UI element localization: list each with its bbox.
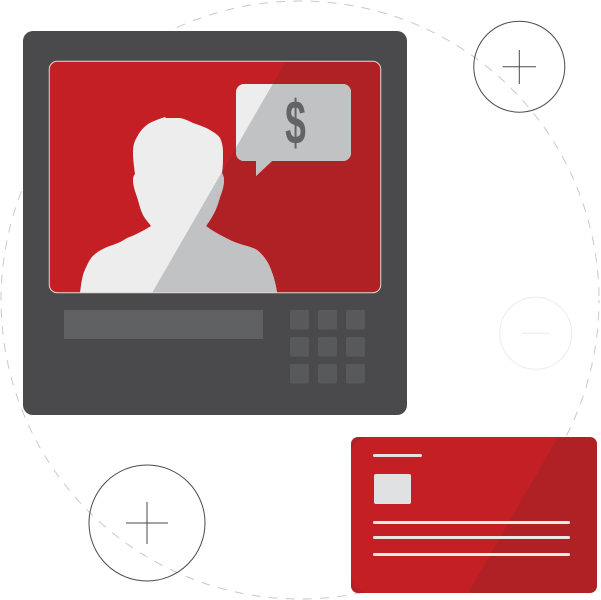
ATM machine [23, 31, 407, 415]
screen shaded diagonal [206, 62, 380, 292]
speech bubble [236, 84, 351, 176]
card chip [374, 474, 411, 504]
plus circle: top right [474, 21, 565, 112]
silhouette of person [80, 117, 277, 292]
card number lines [373, 521, 570, 556]
ATM screen [49, 61, 381, 300]
keypad [290, 310, 365, 384]
plus circle: bottom left [89, 465, 205, 581]
ATM body [23, 31, 407, 415]
card top line [373, 454, 422, 457]
card lighter face [351, 437, 558, 593]
credit card [351, 437, 597, 593]
minus circle: faint right [500, 297, 572, 369]
dollar sign: $ [285, 88, 306, 157]
card reader slot [64, 310, 263, 339]
